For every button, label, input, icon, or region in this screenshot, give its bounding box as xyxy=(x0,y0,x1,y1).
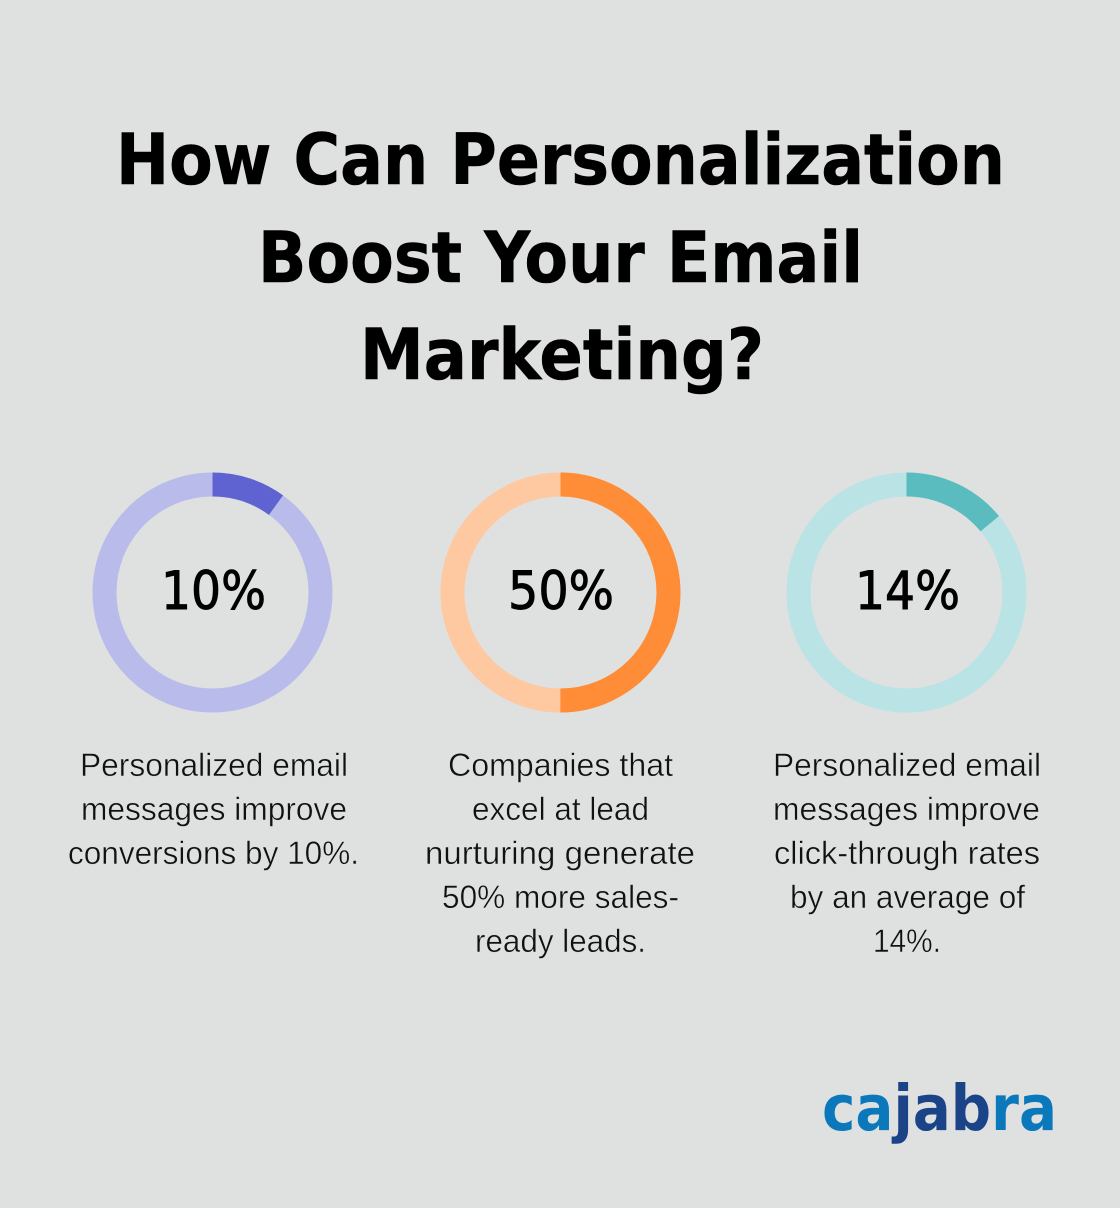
text block: 50% description: excel at lead xyxy=(472,791,649,827)
text block: 14% description: messages improve xyxy=(773,791,1040,827)
donut chart: 14%: 14% xyxy=(855,561,960,622)
title: Boost Your Email xyxy=(258,217,863,299)
donut chart: 10% xyxy=(104,484,320,700)
text block: 14% description: by an average of xyxy=(790,879,1025,915)
donut chart: 10%: 10% xyxy=(161,561,266,622)
text block: 50% description: ready leads. xyxy=(475,923,646,959)
text block: 14% description: click-through rates xyxy=(774,835,1040,871)
title: Marketing? xyxy=(360,314,764,396)
title: How Can Personalization xyxy=(116,119,1005,201)
text block: 10% description: Personalized email xyxy=(80,747,348,783)
text block: 10% description: messages improve xyxy=(81,791,347,827)
donut chart: 50% xyxy=(452,484,668,700)
title xyxy=(116,119,1005,396)
text block: 10% description xyxy=(68,747,359,871)
text block: 14% description xyxy=(773,747,1041,959)
text block: 14% description: 14%. xyxy=(873,923,941,959)
donut chart: 14% xyxy=(798,484,1014,700)
panel: 14% stat xyxy=(773,484,1041,959)
text block: 50% description xyxy=(425,747,695,959)
text block: 14% description: Personalized email xyxy=(773,747,1041,783)
donut chart: 50%: 50% xyxy=(508,561,614,622)
panel: 50% stat xyxy=(425,484,695,959)
logo: cajabra: cajabra xyxy=(822,1072,1057,1145)
text block: 50% description: 50% more sales- xyxy=(442,879,679,915)
text block: 10% description: conversions by 10%. xyxy=(68,835,359,871)
panel: 10% stat xyxy=(68,484,359,871)
text block: 50% description: Companies that xyxy=(448,747,673,783)
text block: 50% description: nurturing generate xyxy=(425,835,695,871)
